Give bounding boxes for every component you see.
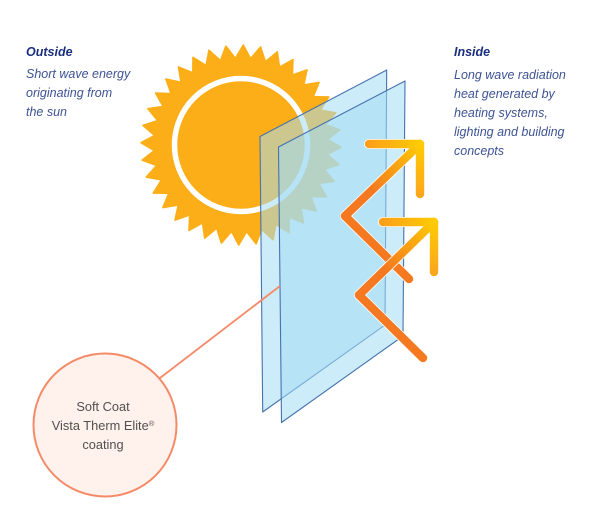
text block: outside [26,45,131,119]
back glass pane [260,70,387,412]
text block: outside: Short wave energy [26,67,131,81]
arrow: lower long wave radiation [359,222,434,358]
callout leader line [160,286,280,378]
arrow: upper long wave radiation [345,144,420,279]
callout: coating: coating [82,437,124,452]
front glass pane [278,81,405,422]
callout: coating: ® [149,419,155,428]
text block: inside [454,45,566,158]
text block: inside: Long wave radiation [454,68,566,82]
callout: coating [34,354,176,496]
text block: inside: concepts [454,144,504,158]
icon: sun [139,43,343,247]
text block: outside: originating from [26,86,112,100]
text block: outside: Outside [26,45,73,59]
text block: inside: heating systems, [454,106,548,120]
callout: coating: Vista Therm Elite [52,418,149,433]
text block: outside: the sun [26,105,67,119]
text block: inside: heat generated by [454,87,556,101]
text block: inside: Inside [454,45,490,59]
callout: coating: Soft Coat [76,399,130,414]
text block: inside: lighting and building [454,125,565,139]
